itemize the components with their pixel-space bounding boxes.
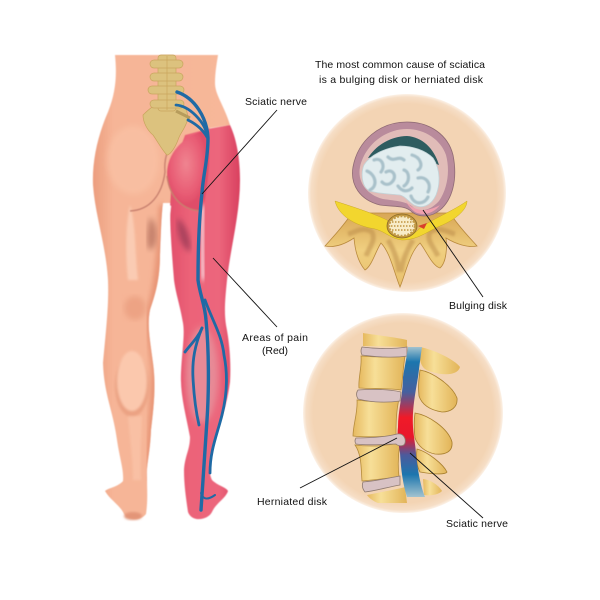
right thigh shadow	[177, 218, 190, 252]
label: bulging disk: Bulging disk	[449, 300, 508, 312]
bulge edge	[405, 200, 440, 214]
label: areas of pain: (Red)	[262, 345, 288, 357]
spine side view	[353, 333, 460, 503]
spinal nerve bundle	[387, 214, 417, 238]
pinched root	[418, 223, 427, 229]
nucleus folds	[367, 155, 429, 203]
glute crease line	[130, 143, 203, 211]
dark crescent	[368, 136, 439, 165]
leader lines	[202, 110, 483, 518]
left knee shade	[124, 296, 146, 320]
annulus	[352, 122, 455, 216]
nucleus	[362, 146, 439, 207]
title	[315, 59, 485, 86]
right calf	[186, 327, 218, 423]
circle: herniated disk	[303, 313, 503, 513]
title: The most common cause of sciatica	[315, 59, 485, 71]
left heel	[124, 512, 142, 520]
nerve glow	[202, 205, 204, 280]
spine and sacrum	[143, 55, 190, 155]
figure: back of legs	[93, 55, 240, 520]
vertebra cross-section	[325, 122, 477, 287]
intervertebral disks	[356, 347, 407, 492]
label: sciatic nerve lower: Sciatic nerve	[446, 518, 508, 530]
spinal cord	[398, 347, 425, 497]
left thigh highlight	[126, 205, 138, 280]
title: is a bulging disk or herniated disk	[319, 74, 484, 86]
annulus inner rim	[359, 129, 448, 210]
spinous processes	[414, 347, 460, 495]
vertebral arch	[325, 213, 477, 287]
label: sciatic nerve: Sciatic nerve	[245, 96, 307, 108]
arch shading	[348, 229, 455, 272]
left thigh shadow	[147, 217, 157, 250]
right leg red area	[170, 125, 240, 519]
label: areas of pain: Areas of pain	[242, 332, 308, 344]
right glute	[167, 130, 209, 211]
sciatic nerve	[176, 92, 226, 510]
circle: bulging disk	[308, 94, 506, 292]
herniated disk	[355, 434, 405, 446]
left glute highlight	[107, 126, 159, 194]
left lower leg highlight	[128, 416, 142, 480]
left leg and torso	[93, 55, 230, 519]
crotch gap	[161, 205, 171, 250]
vertebral bodies	[353, 333, 407, 503]
left leg inner shading	[148, 205, 163, 480]
label: areas of pain	[242, 332, 308, 357]
yellow ligament band	[335, 201, 467, 240]
left calf	[115, 355, 149, 417]
label: herniated disk: Herniated disk	[257, 496, 328, 508]
